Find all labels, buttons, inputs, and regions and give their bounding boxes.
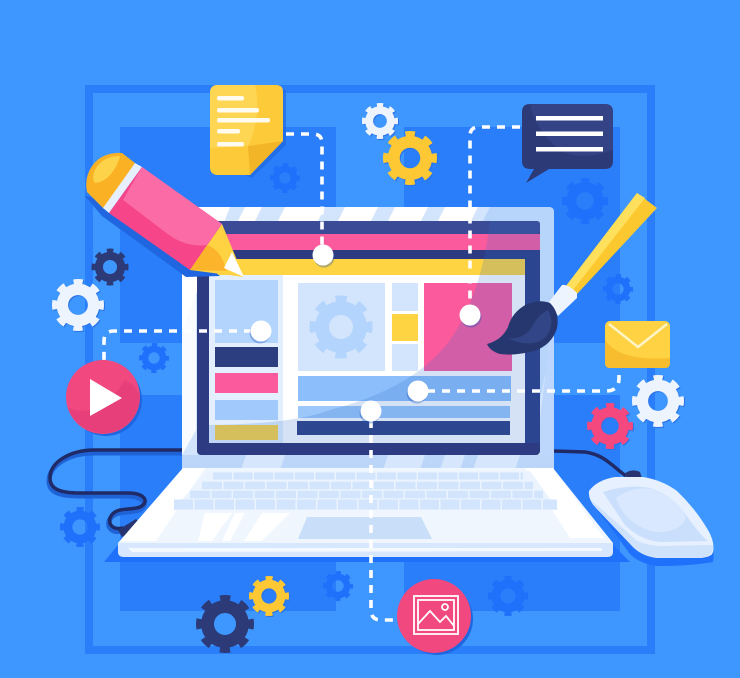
pencil body highlight xyxy=(123,167,222,245)
pencil wood shade xyxy=(190,245,226,271)
pencil band xyxy=(103,163,142,213)
left cable xyxy=(49,450,185,537)
brush handle xyxy=(566,193,657,294)
pencil wood xyxy=(190,224,244,277)
blueprint frame xyxy=(89,89,651,650)
right cable xyxy=(553,451,626,476)
text bars xyxy=(297,376,511,435)
pencil body xyxy=(109,167,222,270)
icon: paintbrush xyxy=(487,193,657,355)
laptop lid bezel xyxy=(182,207,554,470)
blue panels backdrop xyxy=(120,127,620,611)
eraser highlight xyxy=(93,156,120,183)
speech bubble lines xyxy=(536,116,603,152)
deck highlights xyxy=(120,468,604,541)
laptop shadow xyxy=(104,545,630,562)
mouse palm area xyxy=(603,487,708,542)
left cable plug xyxy=(118,519,142,537)
pencil tip xyxy=(224,252,244,277)
icon: image button xyxy=(397,579,473,655)
document lines xyxy=(217,96,270,146)
icon: play button xyxy=(66,360,142,436)
laptop base deck xyxy=(118,468,613,543)
brush bristles xyxy=(487,301,558,355)
gear image block xyxy=(298,283,385,371)
background faint gears xyxy=(63,165,631,613)
document highlight xyxy=(210,85,257,148)
foreground gears xyxy=(55,105,682,649)
mouse xyxy=(589,470,714,566)
screen gear icon xyxy=(314,300,368,354)
mouse plug xyxy=(624,470,643,482)
screen frame xyxy=(197,221,540,455)
screen glare overlay xyxy=(209,221,540,443)
mouse palm highlight xyxy=(616,488,686,532)
pencil eraser xyxy=(86,153,135,209)
icon: pencil xyxy=(85,153,244,277)
screen top strip xyxy=(197,221,540,234)
mouse lower edge xyxy=(591,500,713,558)
pink image block xyxy=(424,283,512,371)
connector dashed lines xyxy=(104,127,619,620)
image frame xyxy=(414,596,458,634)
bezel highlights xyxy=(182,207,554,470)
document fold xyxy=(248,141,283,175)
yellow nav bar xyxy=(209,259,525,275)
mouse shadow xyxy=(590,480,714,566)
laptop front edge xyxy=(118,543,613,557)
small column blocks xyxy=(392,283,418,371)
keyboard xyxy=(173,471,558,510)
envelope flap xyxy=(609,324,667,347)
mouse body xyxy=(589,477,713,558)
icon: envelope xyxy=(605,321,670,368)
pencil shadow xyxy=(85,196,220,277)
connector nodes xyxy=(250,244,482,424)
screen content area xyxy=(209,275,525,443)
play triangle xyxy=(90,379,122,416)
touchpad xyxy=(298,517,432,539)
screen sidebar background xyxy=(209,275,283,443)
brush ferrule xyxy=(549,285,577,316)
sidebar blocks xyxy=(215,280,278,440)
icon: document note xyxy=(210,85,286,178)
pink header bar xyxy=(197,234,540,250)
icon: speech bubble xyxy=(522,104,613,183)
